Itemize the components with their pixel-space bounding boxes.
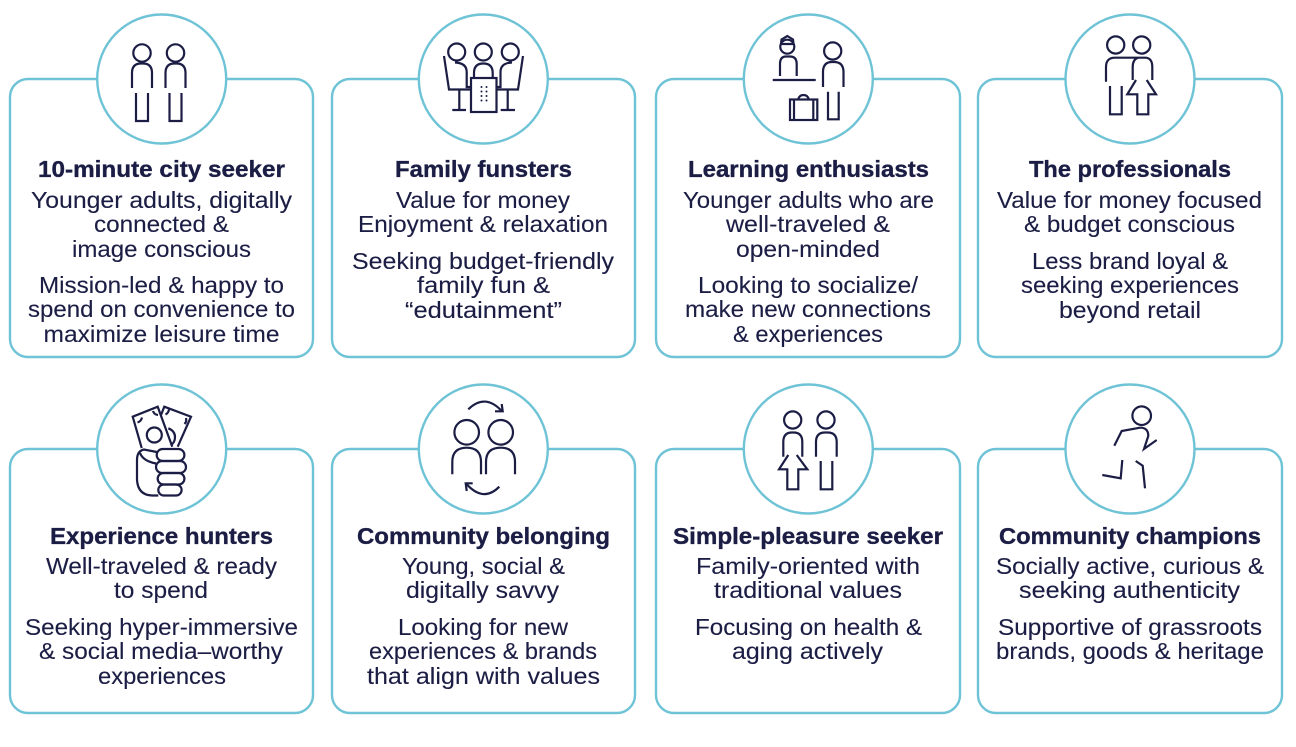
icon: running person bbox=[1102, 406, 1157, 488]
icon: fist holding banknotes bbox=[133, 407, 191, 496]
text block: Learning enthusiasts description: Younger adults who are bbox=[683, 187, 934, 213]
text block: Simple-pleasure seeker description: aging actively bbox=[732, 638, 883, 664]
text block: Family funsters description: family fun & bbox=[417, 272, 550, 298]
text block: The professionals description: beyond retail bbox=[1059, 297, 1201, 323]
text block: Family funsters description bbox=[352, 187, 614, 323]
panel: Learning enthusiasts bbox=[656, 14, 960, 357]
text block: Community belonging description: experiences & brands bbox=[369, 638, 597, 664]
text block: Learning enthusiasts description: Looking to socialize/ bbox=[698, 272, 918, 298]
heading: Community belonging: Community belonging bbox=[357, 523, 610, 549]
text block: 10-minute city seeker description: maximize leisure time bbox=[44, 321, 280, 347]
text block: Community belonging description: digitally savvy bbox=[406, 577, 559, 603]
text block: Experience hunters description: to spend bbox=[114, 577, 208, 603]
panel: Experience hunters bbox=[10, 384, 313, 713]
text block: 10-minute city seeker description: Mission-led & happy to bbox=[39, 272, 284, 298]
text block: Community champions description: Socially active, curious & bbox=[996, 553, 1264, 579]
text block: 10-minute city seeker description: spend on convenience to bbox=[28, 296, 295, 322]
icon: check-in desk with suitcase bbox=[773, 36, 844, 120]
text block: Community champions description: seeking authenticity bbox=[1019, 577, 1240, 603]
text block: Simple-pleasure seeker description: traditional values bbox=[714, 577, 902, 603]
text block: The professionals description: Less brand loyal & bbox=[1032, 248, 1228, 274]
panel: 10-minute city seeker bbox=[10, 14, 313, 357]
heading: Community champions: Community champions bbox=[999, 523, 1261, 549]
text block: Family funsters description: Value for money bbox=[396, 187, 570, 213]
text block: Community belonging description: Looking for new bbox=[398, 614, 569, 640]
text block: Family funsters description: “edutainment” bbox=[405, 297, 562, 323]
text block: Community belonging description: Young, social & bbox=[402, 553, 565, 579]
heading: 10-minute city seeker: 10-minute city seeker bbox=[38, 156, 285, 182]
icon: man and woman side by side bbox=[1106, 36, 1156, 114]
icon: two men bbox=[132, 44, 186, 121]
text block: Experience hunters description: experiences bbox=[98, 663, 226, 689]
text block: Community champions description bbox=[996, 553, 1264, 664]
panel: Community champions bbox=[978, 384, 1282, 713]
text block: Community belonging description: that align with values bbox=[367, 663, 600, 689]
heading: Experience hunters: Experience hunters bbox=[50, 523, 273, 549]
heading: The professionals: The professionals bbox=[1029, 156, 1231, 182]
text block: Experience hunters description bbox=[25, 553, 298, 689]
icon: two people with circular arrows bbox=[452, 402, 515, 494]
panel: Family funsters bbox=[332, 14, 635, 357]
text block: The professionals description bbox=[997, 187, 1262, 323]
panel: The professionals bbox=[978, 14, 1282, 357]
heading: Learning enthusiasts: Learning enthusiasts bbox=[688, 156, 929, 182]
text block: 10-minute city seeker description bbox=[28, 187, 295, 347]
text block: Learning enthusiasts description: & experiences bbox=[733, 321, 883, 347]
text block: The professionals description: Value for money focused bbox=[997, 187, 1262, 213]
text block: Community belonging description bbox=[367, 553, 600, 689]
text block: 10-minute city seeker description: image conscious bbox=[72, 236, 251, 262]
text block: Community champions description: brands, goods & heritage bbox=[996, 638, 1264, 664]
text block: Learning enthusiasts description: open-minded bbox=[736, 236, 880, 262]
icon: woman and man bbox=[779, 411, 837, 489]
text block: The professionals description: seeking experiences bbox=[1021, 272, 1239, 298]
text block: Experience hunters description: Well-traveled & ready bbox=[46, 553, 277, 579]
panel: Community belonging bbox=[332, 384, 635, 713]
text block: Simple-pleasure seeker description: Family-oriented with bbox=[696, 553, 920, 579]
text block: 10-minute city seeker description: Younger adults, digitally bbox=[31, 187, 292, 213]
text block: Family funsters description: Seeking budget-friendly bbox=[352, 248, 614, 274]
icon: three people at a table bbox=[444, 44, 523, 112]
heading: Simple-pleasure seeker: Simple-pleasure seeker bbox=[673, 523, 943, 549]
text block: The professionals description: & budget conscious bbox=[1024, 211, 1235, 237]
text block: 10-minute city seeker description: connected & bbox=[94, 211, 229, 237]
text block: Community champions description: Supportive of grassroots bbox=[998, 614, 1262, 640]
text block: Learning enthusiasts description: well-traveled & bbox=[725, 211, 890, 237]
text block: Experience hunters description: & social media–worthy bbox=[39, 638, 283, 664]
panel: Simple-pleasure seeker bbox=[656, 384, 960, 713]
text block: Learning enthusiasts description bbox=[683, 187, 934, 347]
text block: Learning enthusiasts description: make new connections bbox=[685, 296, 931, 322]
text block: Family funsters description: Enjoyment & relaxation bbox=[358, 211, 608, 237]
heading: Family funsters: Family funsters bbox=[395, 156, 572, 182]
text block: Simple-pleasure seeker description bbox=[695, 553, 922, 664]
text block: Simple-pleasure seeker description: Focusing on health & bbox=[695, 614, 922, 640]
text block: Experience hunters description: Seeking hyper-immersive bbox=[25, 614, 298, 640]
